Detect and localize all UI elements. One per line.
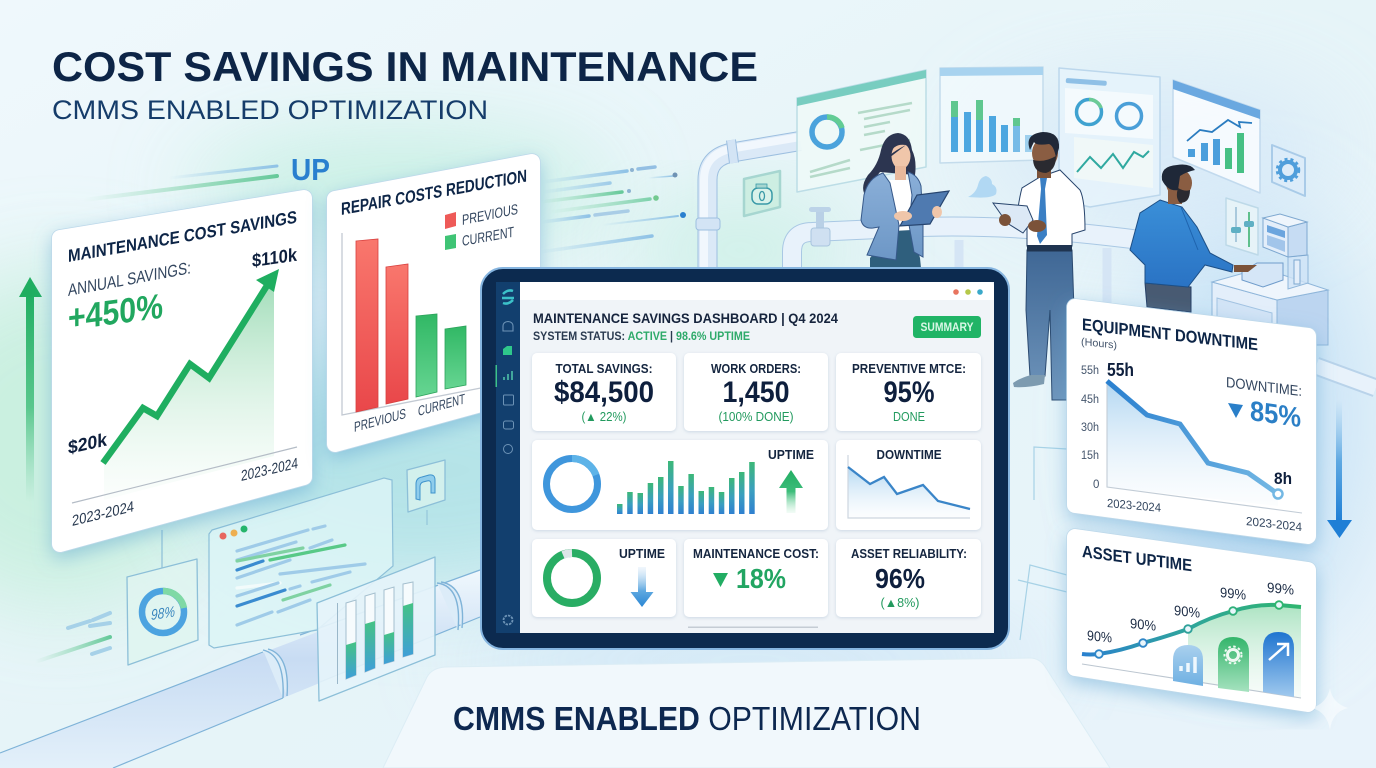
heading: asset uptime: ASSET UPTIME — [1082, 542, 1192, 575]
label: 8h: 8h — [1274, 469, 1292, 488]
donut: blue — [546, 458, 598, 510]
y axis labels — [1081, 365, 1099, 491]
card: work orders: 1,450 — [722, 376, 790, 409]
card: work orders — [684, 353, 828, 431]
card: asset reliability: 96% — [875, 563, 925, 594]
card: maintenance cost: 18% — [736, 563, 786, 594]
card: total savings: (▲ 22%) — [582, 410, 626, 424]
title block — [52, 43, 758, 125]
title block: CMMS ENABLED OPTIMIZATION — [52, 95, 488, 125]
card: asset reliability: ASSET RELIABILITY: — [851, 547, 967, 561]
y axis labels: 45h — [1081, 394, 1099, 406]
tablet frame — [481, 268, 1009, 649]
card: preventive maintenance: PREVENTIVE MTCE: — [852, 362, 966, 376]
y axis labels: 55h — [1081, 365, 1099, 377]
icon: active box — [503, 346, 512, 355]
stat: 85%: 85% — [1250, 395, 1301, 433]
person: technician at machine — [1130, 165, 1257, 312]
panel: floating analytics screen — [1059, 68, 1160, 207]
icon: puzzle glyph — [968, 176, 996, 198]
card: maintenance cost — [684, 539, 828, 617]
icon: settings — [504, 616, 512, 624]
card: preventive maintenance: DONE — [893, 410, 925, 424]
data labels: 90% — [1130, 615, 1156, 634]
card: uptime charts — [532, 440, 828, 530]
bar chart: repair costs — [342, 233, 486, 415]
arrow: blue downward — [1327, 400, 1352, 538]
card: preventive maintenance — [836, 353, 981, 431]
person: woman with tablet — [861, 133, 949, 268]
icon: small pipe fitting — [407, 460, 445, 525]
card: uptime donut — [532, 539, 676, 617]
panel: repair costs reduction — [335, 162, 532, 444]
icon: home — [503, 322, 513, 331]
icon: stack — [504, 421, 514, 429]
panel: 98% donut — [127, 530, 198, 665]
data labels: 90% — [1174, 602, 1200, 621]
pipe: lower left diagonal — [0, 570, 480, 768]
panel: mini bar chart — [317, 557, 435, 701]
top bar — [520, 282, 994, 300]
icon: logo — [502, 290, 514, 304]
bar chart: monthly uptime — [617, 461, 755, 514]
summary button — [913, 316, 981, 338]
data labels: 99% — [1220, 584, 1246, 603]
arrow: uptime up — [779, 470, 803, 513]
label: previous axis: PREVIOUS — [354, 406, 406, 436]
card: uptime donut: UPTIME — [619, 547, 665, 561]
person: man with clipboard — [993, 132, 1085, 400]
card: total savings: TOTAL SAVINGS: — [556, 362, 652, 376]
data labels: 99% — [1267, 579, 1294, 598]
icon: arrow tab — [1263, 632, 1294, 697]
card: downtime chart: DOWNTIME — [876, 448, 942, 462]
system status: SYSTEM STATUS: ACTIVE | 98.6% UPTIME — [533, 331, 750, 343]
bottom light plinth — [383, 658, 1110, 768]
icon: search — [504, 444, 512, 454]
panel: equipment downtime — [1075, 307, 1308, 536]
label: $20k: $20k — [68, 429, 108, 458]
line chart: downtime — [1107, 381, 1302, 513]
label: left period: 2023-2024 — [72, 498, 134, 530]
panel: floating donut screen — [797, 70, 926, 192]
sidebar — [496, 282, 521, 633]
card: work orders: WORK ORDERS: — [711, 362, 801, 376]
title block: COST SAVINGS IN MAINTENANCE — [52, 43, 758, 90]
icon: engine panel — [744, 171, 780, 216]
sparkle decoration — [1312, 688, 1348, 730]
dashboard title: MAINTENANCE SAVINGS DASHBOARD | Q4 2024 — [533, 310, 838, 326]
card: maintenance cost: MAINTENANCE COST: — [693, 547, 819, 561]
heading: maintenance cost savings: MAINTENANCE COST SAVINGS — [68, 207, 297, 266]
bottom heading: CMMS ENABLED OPTIMIZATION — [453, 700, 921, 737]
card: asset reliability — [836, 539, 981, 617]
label: current axis: CURRENT — [418, 391, 465, 420]
icon: gear panel — [1272, 145, 1305, 196]
icon: down triangle — [1228, 403, 1243, 418]
y axis labels: 30h — [1081, 422, 1099, 434]
heading: repair costs reduction: REPAIR COSTS REDUCTION — [341, 166, 527, 219]
legend: CURRENT — [462, 225, 514, 250]
speed lines by UP label — [83, 166, 277, 200]
UP label: UP — [291, 152, 330, 187]
heading: equipment downtime: EQUIPMENT DOWNTIME — [1082, 315, 1258, 354]
stat: +450%: +450% — [68, 287, 163, 338]
label: downtime change: DOWNTIME: — [1226, 375, 1302, 400]
screen — [520, 282, 994, 633]
y axis labels: 0 — [1093, 479, 1099, 491]
card: preventive maintenance: 95% — [884, 376, 934, 409]
label: uptime: UPTIME — [768, 448, 814, 462]
tablet dashboard — [481, 268, 1009, 649]
label: right period: 2023-2024 — [1246, 514, 1302, 534]
line chart: savings growth — [72, 269, 297, 503]
arrow: green rising — [19, 277, 42, 502]
label: left period: 2023-2024 — [1107, 496, 1161, 515]
y axis labels: 15h — [1081, 450, 1099, 462]
speed lines centre top — [540, 167, 686, 252]
label: hours: (Hours) — [1081, 336, 1117, 352]
panel: browser with code lines — [209, 478, 393, 648]
legend: PREVIOUS — [462, 202, 518, 229]
panel: asset uptime — [1075, 537, 1308, 704]
label: 55h peak: 55h — [1107, 360, 1134, 380]
connector lines right — [1018, 447, 1067, 640]
area chart: uptime — [1082, 601, 1301, 698]
panel: 98% donut: 98% — [151, 603, 175, 624]
label: annual savings: ANNUAL SAVINGS: — [68, 257, 191, 300]
icon: gear tab — [1218, 637, 1249, 692]
card: downtime chart — [836, 440, 981, 530]
legend — [445, 202, 518, 250]
card: asset reliability: (▲8%) — [880, 596, 920, 610]
icon: bars tab — [1173, 645, 1203, 686]
data labels: 90% — [1087, 627, 1112, 645]
icon: bars — [504, 371, 512, 380]
card: work orders: (100% DONE) — [718, 410, 794, 424]
machine — [1212, 214, 1328, 345]
card: total savings: $84,500 — [554, 376, 654, 409]
card: total savings — [532, 353, 676, 431]
speed lines left — [35, 613, 110, 662]
pipes: upper scene — [696, 137, 1376, 388]
data labels — [1087, 579, 1294, 645]
panel: floating growth screen — [1173, 80, 1260, 193]
label: right period: 2023-2024 — [241, 455, 298, 485]
panel: maintenance cost savings — [60, 198, 304, 544]
panel: floating bar screen — [940, 67, 1043, 163]
summary button: SUMMARY — [920, 322, 974, 334]
icon: slider panel — [1226, 198, 1258, 255]
label: $110k: $110k — [252, 244, 298, 271]
icon: square — [504, 395, 514, 405]
